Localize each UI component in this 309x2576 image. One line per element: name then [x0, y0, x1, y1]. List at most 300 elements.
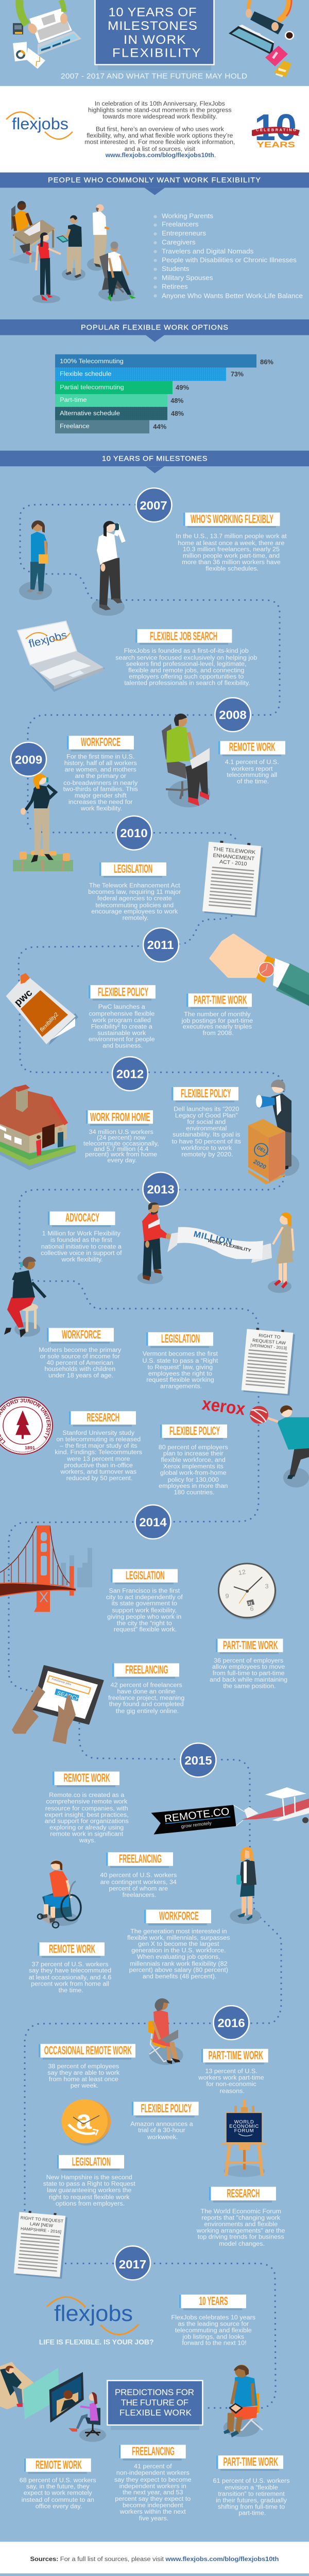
text: legislation 2010: federal agencies to create: [97, 895, 172, 902]
list: people who want flexibility: Travelers and Digital Nomads: [162, 247, 254, 255]
banner: popular flexible work options: [0, 319, 309, 342]
intro text: most interested in. For more flexible work information,: [84, 139, 235, 145]
text: who's working flexibly: flexible schedules.: [205, 565, 259, 572]
document: right to request law new hampshire: HAMPSHIRE - 2016]: [21, 2226, 61, 2234]
title box: predictions: FLEXIBLE WORK: [119, 2408, 192, 2417]
bar: flexible schedule 73%: 73%: [231, 370, 244, 378]
heading: flexible policy pwc: FLEXIBLE POLICY: [98, 986, 148, 998]
heading: flexible job search: FLEXIBLE JOB SEARCH: [150, 630, 217, 642]
heading: remote work 2015 second: REMOTE WORK: [49, 1942, 95, 1955]
text: flexible policy pwc: work program called: [92, 1016, 151, 1024]
text: flexible policy xerox: plan to increase their: [163, 1450, 224, 1457]
text: flexible policy pwc: environment for people: [89, 1036, 155, 1043]
seal: stanford university: 1891: [25, 1445, 35, 1450]
text: freelancing 2014: 42 percent of freelancers: [111, 1682, 182, 1688]
text: research world economic forum: environments and flexible: [204, 2221, 278, 2228]
text: legislation 2013: employees the right to: [148, 1370, 212, 1377]
text: flexible policy pwc: and business.: [102, 1042, 143, 1049]
heading: flexible policy amazon: [132, 2102, 199, 2117]
text: freelancing future: the next year, and 53: [123, 2489, 183, 2496]
text: freelancing future: percent say they expect to: [115, 2495, 191, 2502]
text: legislation san francisco: city to act independently of: [106, 1594, 183, 1601]
text: freelancing 2014: have done an online: [117, 1688, 176, 1695]
text: part-time work 2011: from 2008.: [203, 1029, 234, 1037]
text: remote work 2015 second: at least occasionally, and 4.6: [29, 1974, 112, 1981]
text: part-time work 2014: and back while maintaining: [210, 1676, 287, 1683]
bar: part-time 48%: Part-time: [60, 396, 87, 403]
list: people who want flexibility: [153, 212, 303, 300]
text: flexible job search: talented professionals in search of flexibility.: [124, 680, 250, 687]
text: workforce 2009: major gender shift: [75, 792, 127, 799]
text: freelancing future: say they expect to become: [114, 2476, 192, 2483]
text: workforce 2009: two-thirds of families. This: [63, 786, 138, 793]
text: part-time work future: transition” to retirement: [218, 2490, 285, 2497]
text: flexible job search: employers offering such opportunities to: [129, 673, 244, 680]
illustration: plane towing remote.co banner: [151, 1787, 309, 1835]
illustration: laptop with flexjobs: [18, 621, 105, 692]
heading: legislation 2010: [99, 862, 166, 878]
text: advocacy: collective voice in support of: [41, 1249, 122, 1257]
text: workforce 2009: increases the need for: [68, 799, 133, 805]
illustration: laptop with flexjobs: flexjobs: [27, 629, 68, 650]
document: right to request law new hampshire: RIGHT TO REQUEST: [20, 2215, 63, 2224]
text: research stanford: – the first major study of its: [60, 1442, 137, 1449]
text: workforce 2015: When evaluating job options,: [137, 1953, 220, 1960]
text: 10 years: job listings, and looks: [182, 2333, 244, 2340]
text: remote work future: say, in the future, they: [26, 2483, 90, 2490]
title box: [95, 0, 214, 70]
text: research stanford: workers, and turnover was: [60, 1468, 136, 1475]
text: remote work 2015: ways.: [79, 1837, 96, 1844]
badge: celebrating 10 years: CELEBRATING: [256, 128, 296, 132]
person: man with xerox ball: [250, 1405, 309, 1487]
text: freelancing 2014: freelance project, meaning: [108, 1694, 185, 1701]
text: remote work 2015: expert insight, best practices,: [45, 1811, 129, 1818]
heading: legislation new hampshire: [57, 2155, 124, 2171]
heading: workforce 2009: [67, 736, 134, 751]
text: legislation new hampshire: options from employers.: [56, 2200, 125, 2207]
text: remote work future: office every day.: [36, 2503, 82, 2510]
illustration: clock: 6: [250, 1605, 254, 1613]
text: part-time work 2014: 36 percent of employers: [214, 1657, 283, 1664]
illustration: left desk with laptop: [13, 0, 81, 69]
heading: flexible policy xerox: [160, 1425, 227, 1440]
subtitle: 2007 - 2017 AND WHAT THE FUTURE MAY HOLD: [61, 72, 247, 81]
text: research world economic forum: model changes.: [219, 2240, 265, 2247]
text: flexible job search: search service focused exclusively on helping job: [115, 654, 257, 661]
heading: who's working flexibly: [183, 513, 280, 528]
text: legislation new hampshire: state to pass a Right to Request: [43, 2180, 135, 2188]
title box: predictions: PREDICTIONS FOR: [115, 2387, 194, 2397]
text: flexible policy pwc: PwC launches a: [98, 1003, 145, 1010]
text: workforce 2009: work flexibility.: [80, 805, 122, 812]
text: workforce 2009: are women, and mothers: [65, 766, 136, 773]
illustration: clock: 12: [238, 1568, 246, 1577]
text: part-time work 2016: 13 percent of U.S.: [205, 2067, 258, 2075]
text: advocacy: 1 Million for Work Flexibility: [42, 1230, 121, 1237]
person: woman with folder: [19, 520, 52, 600]
heading: remote work future: [24, 2458, 91, 2474]
bar: alternative schedule 48%: [55, 407, 184, 420]
text: research stanford: productive than in-office: [64, 1462, 133, 1469]
badge: celebrating 10 years: 10: [254, 106, 297, 148]
heading: part-time work future: [216, 2455, 283, 2471]
text: part-time work 2011: job postings for part-time: [181, 1017, 253, 1024]
text: legislation new hampshire: law guaranteeing workers the: [47, 2187, 132, 2194]
banner: 1 million for work flexibility: WORK FLEXIBILITY: [208, 1238, 252, 1253]
text: 10 years: forward to the next 10!: [182, 2340, 247, 2347]
text: research stanford: Stanford University study: [62, 1429, 135, 1436]
text: workforce 2015: millennials rank work flexibility (82: [130, 1960, 228, 1967]
circle: 2012: 2012: [116, 1067, 144, 1081]
text: remote work 2015 second: the time.: [59, 1987, 83, 1994]
logo: flexjobs: [6, 112, 73, 139]
text: legislation san francisco: request” flexible work.: [114, 1626, 177, 1633]
bar: partial telecommuting 49%: 49%: [176, 384, 189, 391]
text: workforce 2015: gen X to become the largest: [138, 1940, 219, 1947]
text: flexible policy xerox: global work-from-home: [160, 1469, 227, 1476]
heading: workforce 2009: WORKFORCE: [81, 736, 121, 749]
heading: part-time work 2011: PART-TIME WORK: [194, 993, 247, 1006]
document: right to request law new hampshire: LAW [NEW: [30, 2221, 54, 2228]
bar: part-time 48%: [55, 394, 184, 407]
text: remote work 2008: 4.1 percent of U.S.: [225, 758, 279, 766]
circle: 2015: [180, 1743, 216, 1777]
text: research world economic forum: working arrangements" are the: [196, 2227, 285, 2234]
heading: advocacy: [48, 1211, 115, 1227]
panel: sources footer: [0, 2542, 309, 2573]
text: flexible policy pwc: comprehensive flexible: [89, 1010, 154, 1018]
circle: 2011: [143, 928, 179, 962]
illustration: hands on tablet search: SEARCH: [56, 1690, 80, 1702]
illustration: amazon clock coin: a: [76, 2105, 92, 2135]
text: workforce 2009: are the primary or: [75, 772, 126, 779]
text: part-time work future: envision a “flexible: [225, 2484, 278, 2491]
circle: 2007: 2007: [140, 499, 167, 512]
text: remote work future: expect to work remotely: [24, 2489, 93, 2497]
list: people who want flexibility: Military Spouses: [162, 274, 213, 281]
bar: partial telecommuting 49%: [55, 381, 189, 394]
person: wheelchair user: [38, 1860, 81, 1928]
person: woman on phone on money: [21, 774, 56, 862]
text: legislation 2010: telecommuting policies and: [95, 902, 174, 909]
illustration: clock: 3: [265, 1583, 269, 1590]
person: man on phone: [92, 521, 125, 616]
illustration: hand with watch: [211, 935, 309, 1006]
text: flexible policy dell: workforce to work: [180, 1144, 232, 1151]
text: flexible policy xerox: policy for 130,000: [168, 1476, 219, 1483]
heading: freelancing 2015: [106, 1852, 173, 1868]
text: freelancing future: 41 percent of: [134, 2463, 172, 2470]
teal screen: [23, 2368, 59, 2419]
heading: flexible policy dell: [171, 1087, 238, 1102]
title box: predictions: [107, 2381, 202, 2430]
illustration: hands on tablet search: [12, 1666, 103, 1744]
text: legislation san francisco: giving people who work in: [107, 1613, 181, 1620]
text: who's working flexibly: million people work part-time, and: [183, 552, 280, 560]
text: legislation 2010: becomes law, requiring 11 major: [88, 888, 181, 895]
badge: celebrating 10 years: YEARS: [256, 141, 295, 149]
text: legislation new hampshire: New Hampshire is the second: [46, 2174, 132, 2181]
text: flexible policy xerox: 180 countries.: [174, 1489, 215, 1496]
illustration: group of workers: [8, 201, 136, 303]
circle: 2008: 2008: [219, 708, 247, 721]
circle: 2014: [135, 1505, 171, 1539]
text: flexible policy dell: for social and: [187, 1118, 226, 1125]
list: people who want flexibility: Retirees: [162, 283, 188, 290]
intro text: www.flexjobs.com/blog/flexjobs10th.: [106, 151, 216, 159]
heading: freelancing future: [119, 2445, 186, 2461]
text: flexible policy dell: Dell launches its “2020: [174, 1106, 239, 1113]
text: flexible job search: seekers find professional-level, legitimate,: [126, 660, 247, 667]
heading: 10 years: [179, 2294, 246, 2310]
bar: partial telecommuting 49%: Partial telecommuting: [60, 384, 124, 391]
text: who's working flexibly: 10.3 million freelancers, nearly 25: [183, 546, 280, 553]
illustration: easel with world economic forum: [221, 2099, 266, 2177]
text: flexible policy amazon: workweek.: [147, 2133, 178, 2141]
panel: introduction: [0, 86, 309, 173]
banner: people who commonly want work flexibility: PEOPLE WHO COMMONLY WANT WORK FLEXIBILITY: [48, 176, 261, 184]
text: part-time work 2016: reasons.: [220, 2088, 245, 2094]
heading: work from home: WORK FROM HOME: [90, 1110, 150, 1124]
circle: 2012: [112, 1057, 148, 1091]
text: workforce 2009: For the first time in U.S.: [66, 753, 134, 760]
heading: remote work 2015: [53, 1771, 119, 1787]
text: legislation san francisco: San Francisco is the first: [109, 1587, 180, 1594]
intro text: flexibility, why, and what flexible work options they’re: [87, 132, 233, 139]
list: people who want flexibility: Caregivers: [162, 239, 196, 246]
text: research world economic forum: reports that "changing work: [201, 2214, 281, 2221]
text: work from home: telecommute occasionally,: [83, 1140, 159, 1147]
heading: freelancing 2015: FREELANCING: [119, 1852, 162, 1865]
title box: IN WORK: [124, 32, 186, 47]
bar: 100% telecommuting 86%: 100% Telecommuting: [60, 358, 124, 365]
illustration: right desk with monitor: [229, 0, 294, 77]
heading: flexible job search: [135, 629, 232, 645]
person: woman on stool with phone: [4, 1257, 45, 1337]
person: speaker at dell podium: [248, 1080, 299, 1184]
text: freelancing future: become independent: [123, 2502, 183, 2509]
circle: 2017: 2017: [119, 2258, 146, 2271]
heading: work from home: [86, 1110, 153, 1126]
heading: workforce 2015: [144, 1909, 211, 1925]
heading: part-time work 2016: [201, 2049, 268, 2064]
text: flexible policy dell: environmental: [186, 1125, 227, 1132]
text: 10 years: FlexJobs celebrates 10 years: [171, 2314, 255, 2321]
logo: flexjobs tagline: flexjobs: [54, 2300, 133, 2326]
intro text: towards more widespread work flexibility.: [102, 113, 217, 120]
bar: freelance 44%: Freelance: [60, 422, 90, 430]
heading: 10 years: 10 YEARS: [199, 2294, 228, 2308]
person: woman with laptop on folding chair: [148, 1998, 183, 2065]
text: flexible policy dell: to have 50 percent of its: [172, 1138, 241, 1145]
heading: legislation san francisco: [111, 1569, 178, 1584]
document: telework enhancement act: ACT - 2010: [219, 859, 247, 867]
document: right to request law vermont: [241, 1327, 296, 1396]
text: occasional remote work: say they are able to work: [47, 2069, 120, 2076]
illustration: plane towing remote.co banner: REMOTE.CO: [164, 1806, 230, 1825]
title box: 10 YEARS OF: [108, 5, 196, 19]
bar: flexible schedule 73%: Flexible schedule: [60, 370, 111, 378]
heading: legislation san francisco: LEGISLATION: [126, 1569, 165, 1582]
heading: remote work 2015 second: [38, 1942, 105, 1958]
text: legislation san francisco: the city the “right to: [117, 1620, 172, 1626]
text: freelancing future: five years.: [139, 2515, 168, 2522]
text: workforce 2013: 40 percent of American: [47, 1359, 113, 1366]
document: telework enhancement act: ENHANCEMENT: [213, 853, 255, 862]
text: advocacy: national initiative to create a: [41, 1243, 122, 1250]
text: work from home: every day.: [107, 1157, 137, 1164]
person: man on folding chair with tablet: [224, 2365, 263, 2437]
title box: FLEXIBILITY: [112, 46, 201, 60]
text: legislation 2013: request flexible working: [146, 1376, 214, 1383]
heading: flexible policy amazon: FLEXIBLE POLICY: [141, 2102, 192, 2115]
text: legislation new hampshire: right to request flexible work: [49, 2194, 130, 2200]
heading: remote work 2008: [218, 740, 285, 756]
banner: 1 million for work flexibility: MILLION: [193, 1229, 233, 1247]
circle: 2017: [115, 2246, 150, 2280]
circle: 2013: [143, 1172, 178, 1206]
text: occasional remote work: from home at least once: [49, 2076, 118, 2082]
text: flexible job search: flexible and remote jobs, and connecting: [128, 667, 245, 674]
circle: 2016: [213, 2006, 249, 2040]
document: right to request law vermont: [VERMONT - 2013]: [250, 1343, 287, 1350]
text: legislation 2013: U.S. state to pass a “Right: [142, 1357, 218, 1364]
text: workforce 2015: and benefits (48 percent).: [143, 1973, 216, 1980]
text: part-time work 2014: allow employees to move: [212, 1663, 285, 1670]
text: workforce 2015: percent) above salary (80 percent): [129, 1967, 228, 1974]
illustration: golden gate bridge: [0, 1526, 92, 1612]
video screen with person: [49, 2372, 84, 2422]
heading: legislation 2013: LEGISLATION: [161, 1332, 200, 1345]
person: woman in dress: [268, 1212, 294, 1293]
illustration: pwc brochure: pwc: [12, 987, 35, 1008]
text: research stanford: reduced by 50 percent.: [66, 1475, 132, 1482]
document: telework enhancement act: THE TELEWORK: [213, 846, 256, 856]
text: remote work 2015: exploring or already using: [49, 1824, 124, 1831]
text: part-time work future: shifting from full-time to: [218, 2503, 285, 2510]
bar chart: flexible work options: [55, 354, 273, 433]
heading: research world economic forum: RESEARCH: [227, 2187, 260, 2200]
text: freelancing 2015: freelancers.: [123, 1891, 156, 1899]
text: flexible policy pwc: sustainable work: [97, 1029, 146, 1037]
text: flexible job search: FlexJobs is founded as a first-of-its-kind job: [124, 647, 249, 654]
text: flexible policy dell: remotely by 2020.: [181, 1151, 233, 1158]
banner: people who commonly want work flexibility: [0, 173, 309, 195]
bar: alternative schedule 48%: Alternative schedule: [60, 410, 120, 417]
text: workforce 2013: households with children: [44, 1365, 115, 1372]
text: remote work 2008: of the time.: [237, 778, 269, 785]
logo: flexjobs: flexjobs: [12, 115, 68, 133]
heading: research world economic forum: [209, 2187, 276, 2202]
text: 10 years: as the leading source for: [178, 2320, 249, 2327]
person: man in red sweater: [138, 1202, 171, 1284]
text: remote work 2015 second: percent work from home all: [31, 1980, 109, 1987]
text: occasional remote work: per week.: [71, 2082, 98, 2089]
text: remote work 2008: telecommuting all: [227, 771, 277, 778]
text: workforce 2015: generation in the U.S. workforce.: [131, 1947, 226, 1954]
circle: 2010: 2010: [120, 826, 148, 840]
text: work from home: percent) work from home: [85, 1151, 157, 1158]
illustration: house: [0, 1084, 76, 1170]
text: legislation san francisco: support work flexibility,: [112, 1607, 177, 1614]
list: people who want flexibility: Working Parents: [162, 212, 213, 219]
text: flexible policy xerox: Xerox implements its: [163, 1463, 224, 1470]
heading: workforce 2015: WORKFORCE: [159, 1909, 199, 1923]
bar: freelance 44%: [55, 420, 167, 433]
text: research stanford: on telecommuting is released: [56, 1436, 141, 1443]
heading: occasional remote work: OCCASIONAL REMOTE WORK: [44, 2044, 132, 2057]
text: legislation 2010: remotely.: [123, 914, 148, 922]
text: workforce 2015: The generation most interested in: [130, 1928, 227, 1935]
text: workforce 2013: or sole source of income for: [40, 1353, 120, 1360]
banner: 10 years of milestones: [0, 451, 309, 473]
bar: 100% telecommuting 86%: [55, 354, 273, 367]
heading: legislation new hampshire: LEGISLATION: [72, 2155, 111, 2168]
banner: 10 years of milestones: 10 YEARS OF MILESTONES: [102, 455, 207, 463]
text: who's working flexibly: more than 36 million workers have: [182, 558, 281, 566]
list: people who want flexibility: People with Disabilities or Chronic Illnesses: [162, 256, 297, 264]
logo: flexjobs tagline: [39, 2297, 153, 2346]
text: legislation 2013: arrangements.: [160, 1383, 202, 1390]
text: workforce 2013: under 18 years of age.: [48, 1372, 113, 1379]
text: remote work 2015: remote work in significant: [50, 1831, 124, 1837]
text: part-time work future: in their futures, gradually: [216, 2497, 287, 2504]
heading: flexible policy xerox: FLEXIBLE POLICY: [169, 1425, 220, 1437]
circle: 2014: 2014: [139, 1516, 167, 1529]
text: workforce 2015: flexible work, millennials, surpasses: [127, 1934, 230, 1941]
text: research world economic forum: The World Economic Forum: [201, 2208, 281, 2215]
text: remote work 2015: and support for organizations: [45, 1818, 129, 1825]
text: part-time work 2011: executives nearly triples: [183, 1023, 252, 1030]
text: legislation 2010: encourage employees to work: [91, 908, 178, 915]
circle: 2009: [11, 742, 46, 776]
person: woman with teal bag: [230, 1847, 261, 1924]
illustration: pwc brochure: [6, 973, 78, 1045]
text: 10 years: telecommuting and flexible: [175, 2327, 252, 2334]
heading: advocacy: ADVOCACY: [65, 1211, 99, 1224]
document: right to request law vermont: RIGHT TO: [259, 1333, 281, 1340]
list: people who want flexibility: Entrepreneurs: [162, 229, 206, 237]
text: work from home: (24 percent) now: [97, 1134, 146, 1141]
text: freelancing 2014: they found and completed: [109, 1701, 184, 1708]
person: speaker at dell podium: 2020: [252, 1158, 268, 1171]
document: right to request law new hampshire: [13, 2210, 68, 2279]
text: freelancing future: non-independent workers: [116, 2469, 190, 2476]
illustration: money stack: [13, 849, 73, 871]
text: remote work 2008: workers report: [231, 765, 273, 772]
bar: alternative schedule 48%: 48%: [171, 410, 184, 417]
illustration: video call between two people: [0, 2362, 106, 2442]
text: remote work 2015: resource for companies, with: [45, 1805, 128, 1812]
circle: 2015: 2015: [184, 1754, 212, 1767]
text: part-time work future: 61 percent of U.S. workers: [213, 2477, 290, 2484]
bar: flexible schedule 73%: [55, 367, 244, 381]
illustration: pwc brochure: flexibility2: [39, 1011, 60, 1033]
text: flexible policy xerox: 80 percent of employers: [159, 1444, 228, 1451]
text: legislation 2010: The Telework Enhancement Act: [89, 882, 180, 889]
intro text: highlights some stand-out moments in the progress: [88, 107, 232, 113]
text: research world economic forum: top driving trends for business: [198, 2233, 284, 2241]
woman on video call: [68, 2392, 106, 2442]
circle: 2007: [136, 488, 172, 522]
document: telework enhancement act: [202, 840, 263, 917]
illustration: clock: [218, 1564, 277, 1620]
text: work from home: and 5.7 million (4.4: [94, 1145, 149, 1153]
heading: occasional remote work: [39, 2044, 135, 2060]
text: freelancing 2014: the gig entirely online.: [116, 1707, 179, 1715]
illustration: easel with world economic forum: WORLD: [234, 2120, 254, 2124]
